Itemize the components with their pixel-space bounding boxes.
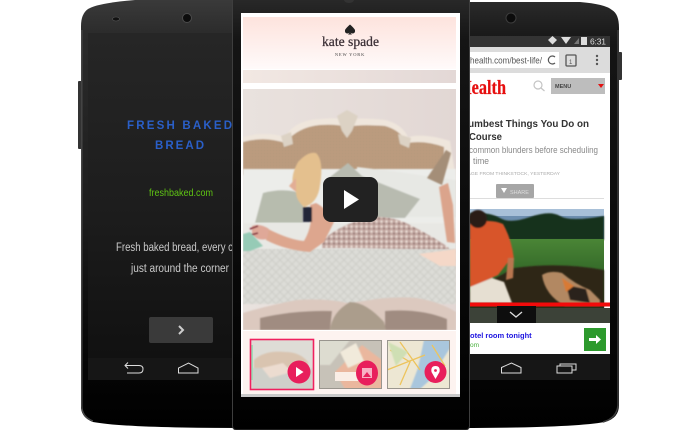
browser bar: health.com/best-life/ (470, 56, 542, 66)
play button (323, 177, 378, 222)
side button right (618, 52, 622, 80)
beige band (243, 70, 456, 83)
red progress line (470, 302, 610, 306)
nav bar (124, 362, 198, 374)
gallery badge (356, 360, 378, 386)
ad banner: om (470, 342, 479, 349)
white screen (241, 13, 460, 397)
dress (322, 217, 449, 249)
panel: right phone (459, 2, 622, 428)
dark strip (470, 308, 610, 323)
nav bar right (470, 354, 610, 380)
footboard (243, 297, 456, 330)
screen right (470, 36, 610, 380)
pillows (243, 163, 456, 229)
thumbnail: map (387, 340, 450, 389)
article subhead (470, 146, 598, 164)
map pin badge (424, 361, 446, 383)
new york: NEW YORK (335, 52, 365, 57)
woman arm and body (250, 150, 455, 252)
earpiece (112, 17, 120, 21)
dog (542, 272, 600, 306)
article headline (470, 120, 588, 140)
spade icon (345, 24, 355, 34)
share button: SHARE (510, 190, 529, 196)
menu button (551, 78, 605, 94)
status bar: 6:31 (590, 36, 606, 46)
search icon (534, 81, 544, 91)
side button (78, 81, 82, 149)
thumbnail: video (250, 339, 314, 390)
article headline: Dumbest Things You Do on (461, 118, 589, 130)
raised leg (439, 183, 455, 243)
clutch (243, 232, 263, 251)
article subhead: common blunders before scheduling (469, 145, 598, 155)
camera (182, 14, 192, 22)
headline (128, 120, 232, 149)
body copy: just around the corner (130, 263, 229, 275)
ad banner (470, 328, 606, 351)
phone body left (81, 0, 240, 428)
hair (292, 153, 321, 207)
Health logo: Health (459, 77, 506, 99)
status bar (470, 36, 610, 47)
collapse tab (497, 306, 536, 323)
menu button: MENU (555, 84, 571, 90)
bedding (243, 223, 456, 250)
panel: left phone (78, 0, 240, 428)
headboard (243, 110, 456, 180)
screen (88, 33, 232, 380)
phone body right (460, 2, 619, 428)
browser bar: 1 (569, 60, 573, 66)
video photo (243, 89, 456, 330)
wall (243, 89, 456, 330)
phone body centre (232, 0, 470, 430)
headline: FRESH BAKED (127, 120, 232, 132)
kate spade logotype: kate spade (322, 34, 379, 49)
thumbnail: gallery (319, 340, 382, 389)
shoe (427, 150, 451, 185)
body copy (116, 242, 233, 275)
article photo (470, 208, 606, 308)
dark top (303, 207, 312, 222)
share button (496, 184, 534, 198)
book on bed (419, 249, 456, 266)
article subhead: time (473, 156, 489, 166)
pink header (243, 17, 456, 69)
browser bar (466, 47, 610, 73)
next button (149, 317, 213, 343)
camera centre (344, 0, 354, 3)
ad banner: otel room tonight (470, 331, 532, 340)
headline: BREAD (155, 140, 204, 152)
url: freshbaked.com (149, 187, 213, 199)
camera right (506, 13, 516, 23)
man in red shirt (469, 210, 514, 303)
thumbnail tray (243, 331, 456, 394)
article headline: Course (469, 131, 502, 143)
body copy: Fresh baked bread, every c (116, 242, 233, 254)
play badge (288, 360, 310, 384)
panel: centre phone (232, 0, 470, 430)
ad arrow button (584, 328, 606, 351)
byline: IMAGE FROM THINKSTOCK, YESTERDAY (462, 171, 561, 177)
